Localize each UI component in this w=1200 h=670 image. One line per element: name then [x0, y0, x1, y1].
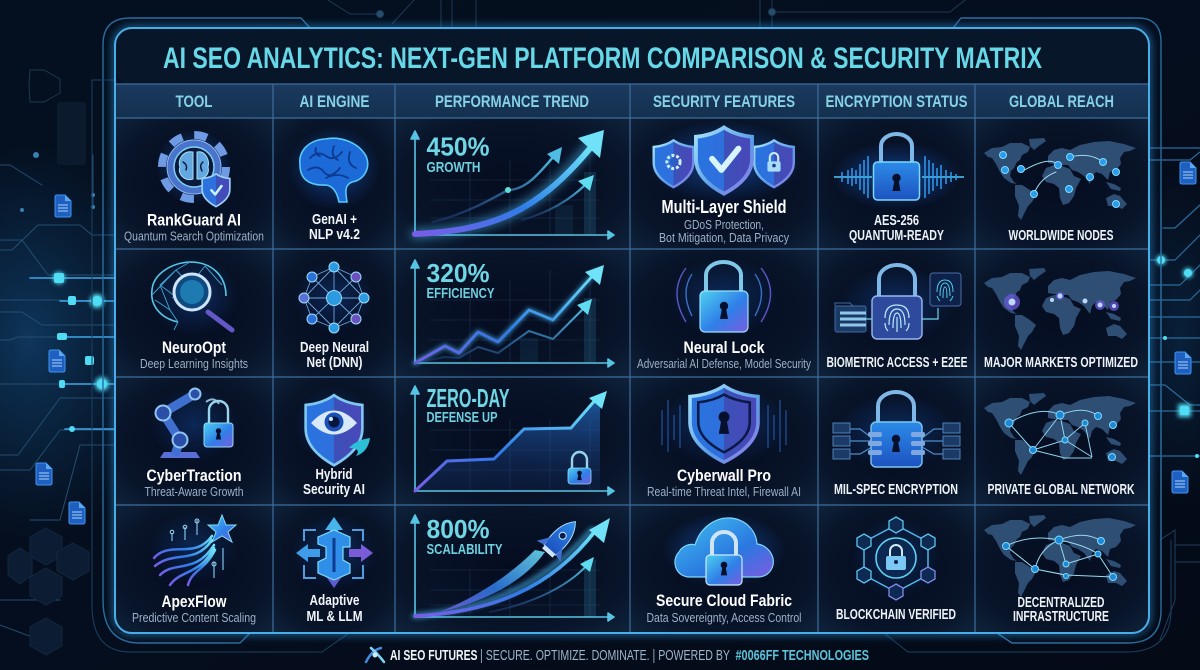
row 4: trend chart — [411, 511, 614, 621]
row 4: trend chart: 800% — [426, 514, 490, 544]
footer: #0066FF TECHNOLOGIES — [736, 648, 869, 664]
row 3: trend chart: DEFENSE UP — [426, 409, 498, 426]
row 1: GenAI engine — [288, 126, 380, 243]
icon: footer logo — [366, 648, 384, 662]
chart grid — [430, 150, 600, 235]
row 2: trend chart: 320% — [426, 258, 490, 288]
row 1: trend chart: GROWTH — [426, 159, 480, 176]
icon: blockchain hexagon — [852, 517, 940, 600]
icon: circuit padlock — [833, 392, 960, 470]
row 1: Multi-Layer Shield: Multi-Layer Shield — [662, 197, 786, 217]
row 1: Worldwide nodes: WORLDWIDE NODES — [1008, 228, 1114, 244]
chart axes — [411, 260, 614, 367]
row 1: RankGuard AI — [124, 129, 264, 244]
header row — [116, 84, 1148, 118]
second arrow — [490, 557, 594, 612]
row 1: GenAI engine: NLP v4.2 — [309, 226, 360, 243]
row 1: RankGuard AI: RankGuard AI — [147, 210, 241, 230]
panel: matrix — [115, 28, 1149, 633]
chart axes — [411, 515, 614, 621]
left circuit decoration — [0, 70, 115, 655]
row 3: private network: PRIVATE GLOBAL NETWORK — [988, 482, 1135, 498]
icon: cube with four arrows — [292, 514, 376, 590]
row 3: private network — [984, 393, 1136, 498]
footer: | SECURE. OPTIMIZE. DOMINATE. | POWERED BY — [480, 648, 730, 664]
row 4: ApexFlow — [132, 512, 256, 625]
row 4: decentralized — [984, 515, 1136, 625]
row 3: Hybrid Security AI — [294, 387, 374, 498]
row 1: AES-256 — [832, 134, 964, 244]
icon: rocket — [440, 511, 587, 612]
row 2: NeuroOpt — [140, 256, 248, 371]
icon: star with flowing streams — [150, 512, 238, 585]
row 3: CyberTraction: CyberTraction — [146, 466, 242, 485]
row 1: AES-256: AES-256 — [874, 213, 919, 229]
row 1: Multi-Layer Shield — [646, 120, 802, 245]
row 1: GenAI engine: GenAI + — [312, 211, 357, 228]
row 2: NeuroOpt: Deep Learning Insights — [140, 357, 248, 371]
icon: right document icons — [1172, 162, 1196, 493]
row 4: blockchain — [836, 517, 956, 623]
row 4: Adaptive ML & LLM: Adaptive — [310, 592, 360, 609]
row 2: trend chart — [411, 258, 614, 367]
row 2: Neural Lock — [637, 258, 812, 371]
row 3: CyberTraction — [144, 387, 244, 499]
row 1: RankGuard AI: Quantum Search Optimization — [124, 230, 264, 244]
icon: biometric lock — [835, 265, 961, 342]
icon: world map with links — [984, 393, 1136, 475]
main line arrow — [415, 391, 607, 491]
row 3: Cyberwall Pro: Real-time Threat Intel, Firewall AI — [647, 485, 801, 499]
row 4: trend chart: SCALABILITY — [426, 541, 502, 558]
main line arrow — [415, 265, 604, 363]
header row: AI ENGINE — [300, 93, 370, 111]
chart axes — [411, 131, 614, 239]
top circuit decoration — [328, 0, 965, 28]
row 4: ApexFlow: Predictive Content Scaling — [132, 611, 256, 625]
icon: padlock with arcs — [670, 258, 778, 338]
row 3: Cyberwall Pro — [647, 385, 801, 499]
row 1: Worldwide nodes — [984, 138, 1136, 244]
row 4: decentralized: DECENTRALIZED — [1018, 595, 1104, 611]
row 2: Deep Neural Net — [294, 262, 374, 371]
row 2: trend chart: EFFICIENCY — [426, 285, 494, 302]
row 1: trend chart — [411, 130, 614, 239]
row 4: Adaptive ML & LLM: ML & LLM — [306, 608, 362, 625]
row 1: Multi-Layer Shield: GDoS Protection, — [684, 218, 764, 232]
row 4: Secure Cloud Fabric — [646, 512, 802, 625]
row 4: blockchain: BLOCKCHAIN VERIFIED — [836, 607, 956, 623]
icon: three shields — [646, 120, 802, 204]
row 2: biometric — [826, 265, 968, 371]
row 2: major markets — [984, 268, 1138, 371]
row 2: Neural Lock: Adversarial AI Defense, Model Security — [637, 357, 812, 371]
row 4: Adaptive ML & LLM — [292, 514, 376, 625]
row 2: Neural Lock: Neural Lock — [684, 338, 765, 357]
footer: AI SEO FUTURES — [390, 648, 478, 664]
icon: gear brain shield — [156, 129, 232, 207]
row 4: Secure Cloud Fabric: Data Sovereignty, Access Control — [646, 611, 802, 625]
panel border — [115, 28, 1149, 633]
icon: shield with eye — [294, 387, 374, 465]
area under line — [415, 395, 600, 491]
row 4: decentralized: INFRASTRUCTURE — [1013, 609, 1109, 625]
row 2: Deep Neural Net: Deep Neural — [300, 339, 369, 356]
row 2: NeuroOpt: NeuroOpt — [162, 338, 226, 357]
icon: small padlock — [568, 452, 591, 484]
row 4: Secure Cloud Fabric: Secure Cloud Fabric — [656, 591, 792, 610]
header row: PERFORMANCE TREND — [435, 93, 589, 111]
secondary arrows — [433, 147, 594, 222]
second line arrow — [415, 299, 592, 363]
row 1: trend chart: 450% — [426, 132, 490, 162]
row 2: Deep Neural Net: Net (DNN) — [306, 354, 363, 371]
row 3: trend chart: ZERO-DAY — [426, 383, 510, 413]
header row: SECURITY FEATURES — [653, 93, 795, 111]
panel glow — [115, 28, 1149, 633]
chart axes — [411, 386, 614, 495]
icon: brain — [288, 126, 380, 210]
icon: wireframe brain with magnifier — [150, 256, 238, 336]
row 2: major markets: MAJOR MARKETS OPTIMIZED — [984, 355, 1138, 371]
icon: robot arm with padlock — [150, 387, 238, 463]
table cells background — [116, 118, 1148, 632]
row 3: trend chart — [411, 383, 614, 495]
row 3: MIL-SPEC: MIL-SPEC ENCRYPTION — [834, 482, 958, 498]
row 1: AES-256: QUANTUM-READY — [849, 228, 944, 244]
icon: world map with market hubs — [984, 268, 1136, 350]
icon: cloud with padlock — [662, 512, 786, 588]
big arrow — [415, 518, 610, 616]
header row: TOOL — [176, 93, 212, 111]
row 3: Hybrid Security AI: Hybrid — [316, 466, 352, 483]
icon: neural network — [294, 262, 374, 334]
row 3: MIL-SPEC — [833, 392, 960, 498]
icon: shield with keyhole — [659, 385, 789, 465]
row 1: Multi-Layer Shield: Bot Mitigation, Data Privacy — [659, 231, 790, 245]
row 3: Hybrid Security AI: Security AI — [303, 481, 365, 498]
icon: world map with mesh — [984, 515, 1136, 597]
row 3: CyberTraction: Threat-Aware Growth — [144, 485, 244, 499]
row 2: biometric: BIOMETRIC ACCESS + E2EE — [826, 355, 968, 371]
footer — [366, 648, 869, 664]
row 4: ApexFlow: ApexFlow — [162, 592, 227, 611]
big arrow — [415, 130, 604, 234]
icon: left document icons — [36, 195, 85, 524]
icon: world map — [984, 138, 1136, 220]
header row: ENCRYPTION STATUS — [826, 93, 968, 111]
header row: GLOBAL REACH — [1009, 93, 1114, 111]
right circuit decoration — [1149, 148, 1200, 640]
icon: lock with waveform — [832, 134, 964, 210]
row 3: Cyberwall Pro: Cyberwall Pro — [677, 466, 771, 485]
